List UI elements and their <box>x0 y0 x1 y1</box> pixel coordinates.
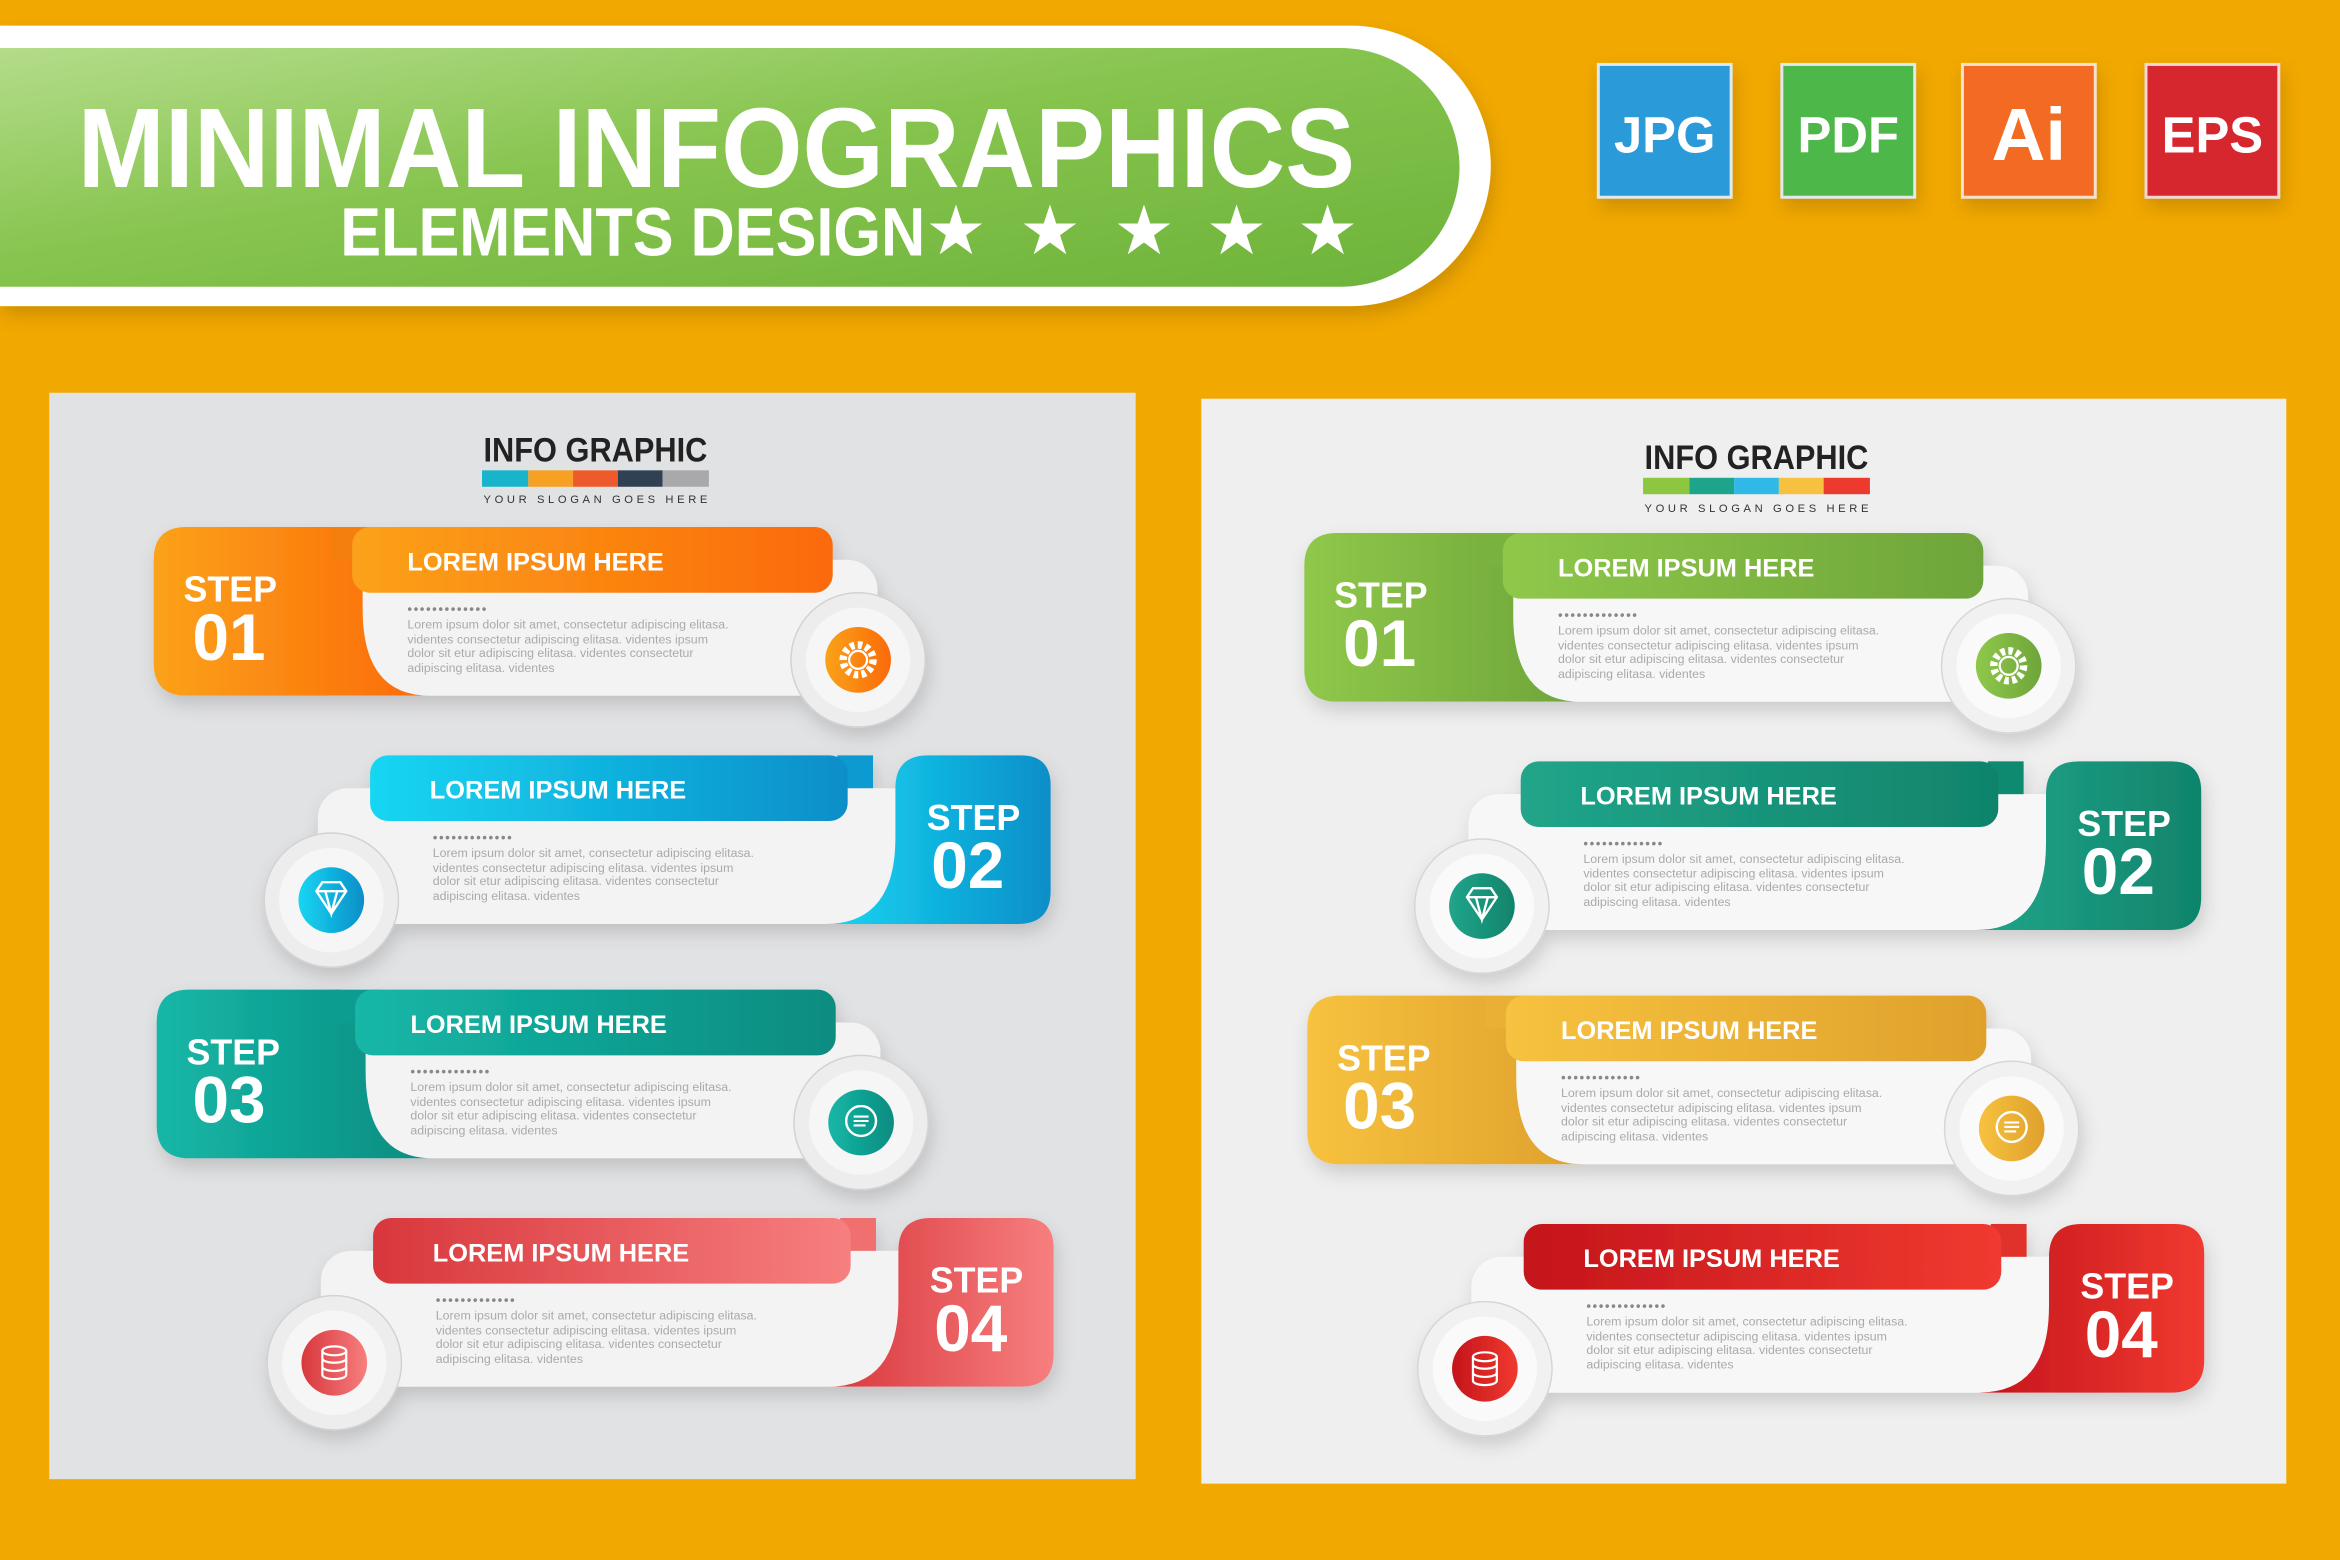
icon: gear <box>791 593 925 727</box>
step 02: LOREM IPSUM HERE <box>1580 783 1837 811</box>
step 04: STEP <box>2080 1267 2174 1307</box>
step 04: LOREM IPSUM HERE <box>433 1239 689 1267</box>
step 02: ••••••••••••• <box>1583 836 1664 851</box>
step 01: dolor sit etur adipiscing elitasa. videntes consectetur <box>407 646 694 660</box>
step 02: Lorem ipsum dolor sit amet, consectetur adipiscing elitasa. <box>433 846 754 860</box>
step 01: 01 <box>1343 607 1416 680</box>
step 02: videntes consectetur adipiscing elitasa. videntes ipsum <box>1583 867 1884 881</box>
step 01: 01 <box>193 601 266 674</box>
step 01: adipiscing elitasa. videntes <box>1558 667 1705 681</box>
step 01: STEP <box>1334 576 1428 616</box>
step 02: dolor sit etur adipiscing elitasa. videntes consectetur <box>1583 880 1870 894</box>
step 01: adipiscing elitasa. videntes <box>407 661 555 675</box>
icon: gear <box>1942 599 2076 733</box>
step 02 <box>1415 761 2201 973</box>
step 02: 02 <box>931 829 1004 902</box>
banner <box>0 26 1491 306</box>
step 03: 03 <box>1343 1069 1416 1142</box>
step 03 <box>157 990 928 1190</box>
icon: PDF: PDF <box>1798 106 1899 163</box>
subtitle: ★ <box>1019 192 1081 269</box>
step 01: ••••••••••••• <box>407 602 488 617</box>
step 02: LOREM IPSUM HERE <box>430 777 686 805</box>
step 02: dolor sit etur adipiscing elitasa. videntes consectetur <box>433 874 719 888</box>
step 04: adipiscing elitasa. videntes <box>1586 1358 1734 1372</box>
step 02: videntes consectetur adipiscing elitasa. videntes ipsum <box>433 861 733 875</box>
step 04: dolor sit etur adipiscing elitasa. videntes consectetur <box>436 1337 722 1351</box>
step 02: 02 <box>2082 835 2155 908</box>
step 03: STEP <box>1337 1038 1431 1078</box>
step 04: Lorem ipsum dolor sit amet, consectetur adipiscing elitasa. <box>1586 1314 1908 1328</box>
icon: Ai: Ai <box>1992 92 2066 176</box>
icon: JPG <box>1598 64 1731 197</box>
step 01: ••••••••••••• <box>1558 608 1639 623</box>
step 01: videntes consectetur adipiscing elitasa. videntes ipsum <box>407 632 708 646</box>
icon: EPS: EPS <box>2162 106 2263 163</box>
step 03: dolor sit etur adipiscing elitasa. videntes consectetur <box>1561 1114 1847 1128</box>
step 03: adipiscing elitasa. videntes <box>410 1123 558 1137</box>
step 01: LOREM IPSUM HERE <box>407 548 664 576</box>
step 03: LOREM IPSUM HERE <box>410 1011 667 1039</box>
step 03: STEP <box>187 1032 280 1072</box>
step 04 <box>1418 1224 2204 1436</box>
step 04: STEP <box>930 1261 1023 1301</box>
step 01: videntes consectetur adipiscing elitasa. videntes ipsum <box>1558 638 1859 652</box>
step 04 <box>267 1218 1054 1430</box>
step 01 <box>1304 533 2076 733</box>
step 04: ••••••••••••• <box>436 1293 516 1308</box>
step 01: LOREM IPSUM HERE <box>1558 554 1814 582</box>
panel: right infographic <box>1201 399 2286 1484</box>
icon: JPG: JPG <box>1614 106 1715 163</box>
step 02: adipiscing elitasa. videntes <box>433 889 580 903</box>
step 02: STEP <box>927 798 1020 838</box>
panel heading: INFO GRAPHIC <box>1645 439 1868 477</box>
subtitle: ★ <box>925 192 987 269</box>
icon: chat <box>1945 1061 2079 1196</box>
step 04: 04 <box>2085 1298 2158 1371</box>
panel heading <box>1643 439 1870 515</box>
step 03: Lorem ipsum dolor sit amet, consectetur adipiscing elitasa. <box>1561 1086 1882 1100</box>
icon: diamond <box>1415 839 1549 973</box>
panel heading: INFO GRAPHIC <box>484 431 707 469</box>
step 02: ••••••••••••• <box>433 830 513 845</box>
icon: Ai <box>1962 64 2095 197</box>
step 01: STEP <box>184 570 277 610</box>
step 04: Lorem ipsum dolor sit amet, consectetur adipiscing elitasa. <box>436 1308 757 1322</box>
step 04: adipiscing elitasa. videntes <box>436 1352 583 1366</box>
panel: left infographic <box>49 393 1136 1479</box>
subtitle: ELEMENTS DESIGN <box>340 193 925 270</box>
step 03: ••••••••••••• <box>410 1064 491 1079</box>
subtitle: ★ <box>1206 192 1267 269</box>
step 04: videntes consectetur adipiscing elitasa. videntes ipsum <box>436 1323 736 1337</box>
step 02 <box>264 755 1051 967</box>
step 03: dolor sit etur adipiscing elitasa. videntes consectetur <box>410 1109 697 1123</box>
step 03: videntes consectetur adipiscing elitasa. videntes ipsum <box>1561 1101 1862 1115</box>
step 02: adipiscing elitasa. videntes <box>1583 895 1731 909</box>
title: MINIMAL INFOGRAPHICS <box>78 85 1355 212</box>
icon: PDF <box>1782 64 1915 197</box>
step 04: ••••••••••••• <box>1586 1299 1667 1314</box>
step 03: Lorem ipsum dolor sit amet, consectetur adipiscing elitasa. <box>410 1080 732 1094</box>
step 04: dolor sit etur adipiscing elitasa. videntes consectetur <box>1586 1343 1873 1357</box>
step 03: ••••••••••••• <box>1561 1070 1641 1085</box>
icon: chat <box>794 1055 928 1190</box>
subtitle <box>340 192 1358 270</box>
icon: database <box>267 1296 401 1430</box>
icon: diamond <box>264 833 398 967</box>
step 04: 04 <box>934 1292 1008 1365</box>
step 03: 03 <box>193 1063 266 1136</box>
step 02: STEP <box>2077 804 2171 844</box>
step 03: LOREM IPSUM HERE <box>1561 1017 1817 1045</box>
subtitle: ★ <box>1297 192 1358 269</box>
panel heading: YOUR SLOGAN GOES HERE <box>1645 503 1868 515</box>
step 03: adipiscing elitasa. videntes <box>1561 1129 1708 1143</box>
step 01: dolor sit etur adipiscing elitasa. videntes consectetur <box>1558 652 1844 666</box>
step 04: videntes consectetur adipiscing elitasa. videntes ipsum <box>1586 1329 1887 1343</box>
step 01: Lorem ipsum dolor sit amet, consectetur adipiscing elitasa. <box>1558 623 1879 637</box>
panel heading: YOUR SLOGAN GOES HERE <box>484 494 707 506</box>
icon: EPS <box>2146 64 2279 197</box>
step 01 <box>154 527 925 727</box>
step 03: videntes consectetur adipiscing elitasa. videntes ipsum <box>410 1095 711 1109</box>
step 03 <box>1307 996 2079 1196</box>
step 04: LOREM IPSUM HERE <box>1583 1245 1840 1273</box>
icon: database <box>1418 1302 1552 1436</box>
subtitle: ★ <box>1113 192 1175 269</box>
step 02: Lorem ipsum dolor sit amet, consectetur adipiscing elitasa. <box>1583 852 1905 866</box>
step 01: Lorem ipsum dolor sit amet, consectetur adipiscing elitasa. <box>407 618 729 632</box>
panel heading <box>482 431 709 506</box>
